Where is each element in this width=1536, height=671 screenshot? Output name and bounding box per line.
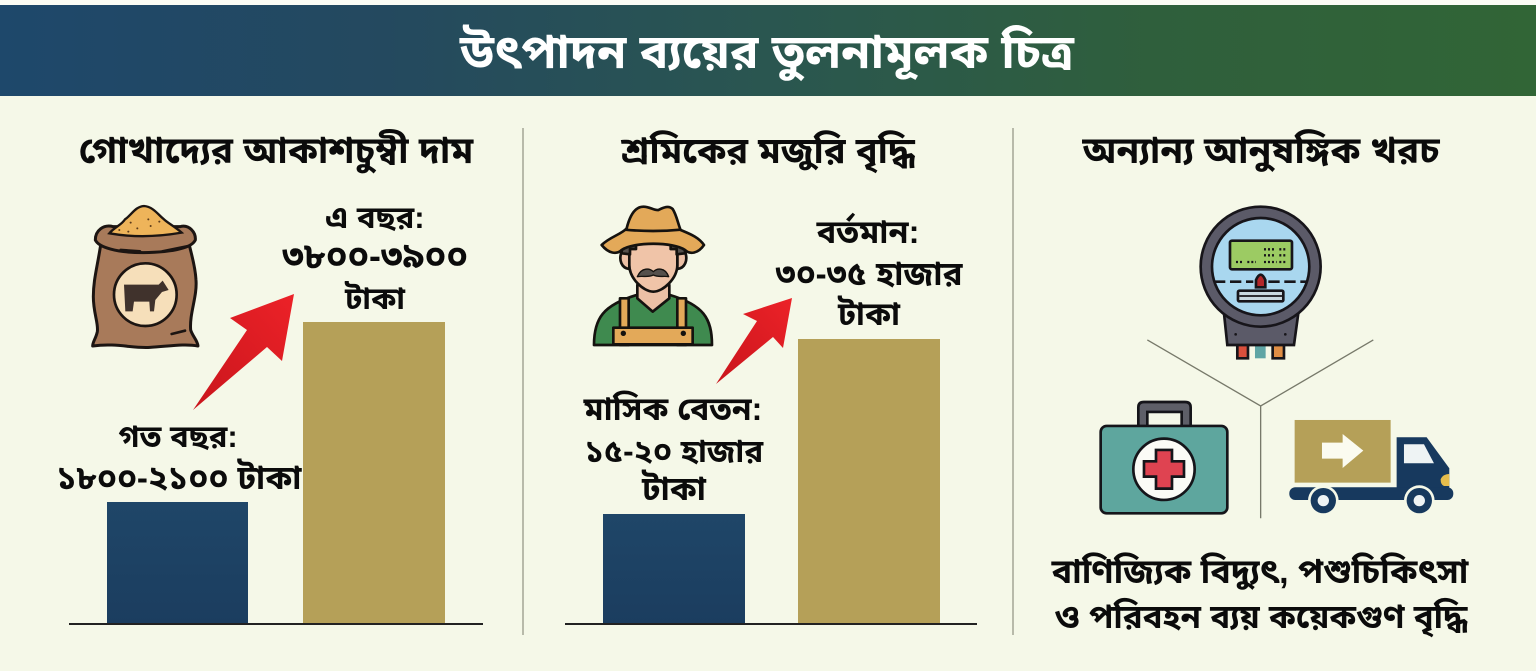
text: current wage: ৩০-৩৫ হাজার [775, 255, 964, 292]
heading: wages: শ্রমিকের মজুরি বৃদ্ধি [620, 130, 916, 174]
icon: farmer [594, 207, 712, 345]
text: cost summary: ও পরিবহন ব্যয় কয়েকগুণ বৃদ্ধি [1055, 598, 1468, 638]
text: monthly wage: টাকা [641, 470, 707, 507]
arrow: wage increase [716, 298, 792, 384]
bar: current wage [798, 339, 940, 624]
text: this year price: টাকা [344, 280, 406, 316]
text: cost summary [1051, 551, 1469, 638]
icon: feed sack [93, 206, 198, 348]
icon: truck [1289, 420, 1453, 516]
title banner: উৎপাদন ব্যয়ের তুলনামূলক চিত্র [459, 24, 1075, 82]
bar: last year [107, 502, 248, 624]
title banner [0, 5, 1536, 96]
panel: wages [565, 130, 977, 624]
heading: other costs: অন্যান্য আনুষঙ্গিক খরচ [1081, 130, 1440, 173]
text: monthly wage [583, 391, 764, 507]
text: this year price: এ বছর: [325, 200, 425, 235]
text: current wage: বর্তমান: [816, 212, 919, 250]
text: last year price: ১৮০০-২১০০ টাকা [57, 459, 302, 496]
icon: medical kit [1101, 402, 1227, 513]
text: last year price [57, 419, 302, 496]
bar: earlier wage [603, 514, 745, 624]
text: monthly wage: ১৫-২০ হাজার [585, 433, 764, 469]
text: current wage [775, 212, 964, 332]
heading: fodder: গোখাদ্যের আকাশচুম্বী দাম [79, 130, 474, 174]
text: cost summary: বাণিজ্যিক বিদ্যুৎ, পশুচিকিৎসা [1051, 551, 1469, 592]
arrow: fodder increase [193, 294, 294, 410]
text: this year price [282, 200, 468, 316]
text: monthly wage: মাসিক বেতন: [583, 391, 762, 427]
text: this year price: ৩৮০০-৩৯০০ [282, 236, 468, 276]
connector lines [1147, 340, 1373, 518]
text: current wage: টাকা [837, 296, 901, 332]
bar: this year [303, 322, 445, 624]
text: last year price: গত বছর: [118, 419, 238, 454]
icon: electric meter [1201, 207, 1321, 358]
panel: other costs [1051, 130, 1469, 638]
panel: fodder price [57, 130, 483, 624]
